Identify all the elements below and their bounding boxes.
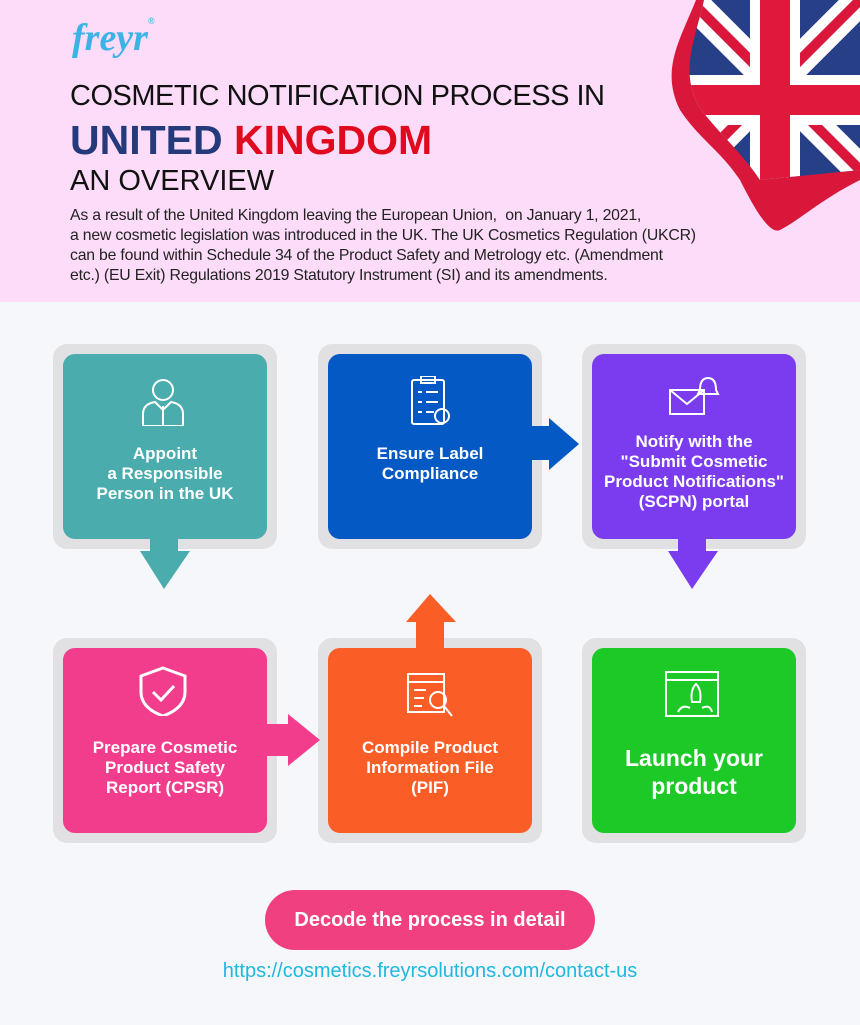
step 6: Launch your	[625, 745, 763, 771]
step 3: (SCPN) portal	[639, 492, 749, 511]
step 3: Product Notifications"	[604, 472, 784, 491]
step 1: Appoint	[133, 444, 197, 463]
url: https://cosmetics.freyrsolutions.com/contact-us	[223, 960, 637, 982]
icon: shield	[140, 666, 186, 716]
arrow: down teal	[140, 539, 190, 589]
step 3	[582, 344, 806, 549]
icon: checklist	[411, 376, 450, 425]
step 2	[318, 344, 542, 549]
step 2: Ensure Label	[377, 444, 483, 463]
intro text: As a result of the United Kingdom leaving the European Union, on January 1, 2021,	[70, 207, 641, 224]
step 6: product	[651, 773, 737, 799]
step 1	[53, 344, 277, 549]
icon: document search	[407, 673, 453, 717]
title	[70, 80, 604, 197]
step 5: (PIF)	[411, 778, 449, 797]
step 2: Compliance	[382, 464, 478, 483]
intro text: a new cosmetic legislation was introduced in the UK. The UK Cosmetics Regulation (UKCR)	[70, 227, 696, 244]
step 5: Information File	[366, 758, 494, 777]
step 4	[53, 638, 277, 843]
logo: freyr®	[72, 16, 155, 59]
button: Decode the process in detail	[294, 909, 566, 931]
step 5	[318, 638, 542, 843]
step 3: "Submit Cosmetic	[621, 452, 767, 471]
arrow: up orange	[406, 594, 456, 648]
icon: envelope bell	[669, 377, 720, 415]
flag	[672, 0, 860, 231]
button	[265, 890, 595, 950]
header band	[0, 0, 860, 302]
arrow: down purple	[668, 539, 718, 589]
step 1: a Responsible	[107, 464, 223, 483]
icon: rocket window	[665, 671, 719, 717]
step 4: Product Safety	[105, 758, 225, 777]
step 3: Notify with the	[635, 432, 753, 451]
step 6	[582, 638, 806, 843]
title: AN OVERVIEW	[70, 165, 274, 197]
step 4: Prepare Cosmetic	[93, 738, 237, 757]
title: UNITED KINGDOM	[70, 117, 432, 163]
arrow: right blue	[532, 418, 579, 470]
title: COSMETIC NOTIFICATION PROCESS IN	[70, 80, 604, 112]
step 1: Person in the UK	[97, 484, 233, 503]
intro text: etc.) (EU Exit) Regulations 2019 Statutory Instrument (SI) and its amendments.	[70, 267, 608, 284]
arrow: right pink	[267, 714, 320, 766]
intro text	[70, 207, 696, 284]
icon: person	[142, 379, 184, 426]
step 4: Report (CPSR)	[106, 778, 224, 797]
step 5: Compile Product	[362, 738, 498, 757]
intro text: can be found within Schedule 34 of the Product Safety and Metrology etc. (Amendment	[70, 247, 663, 264]
